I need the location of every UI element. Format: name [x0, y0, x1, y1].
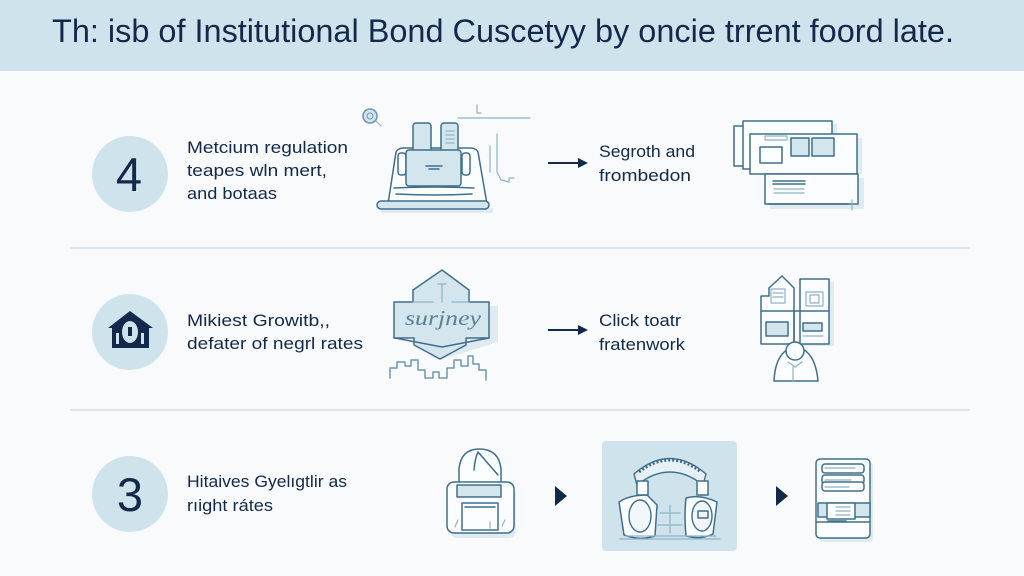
row 1 description: teapes wln mert,: [187, 161, 327, 180]
arrow: [548, 158, 588, 168]
row 2 result text: fratenwork: [599, 335, 686, 354]
arrow: [548, 325, 588, 335]
icon: survey shield and skyline: [390, 270, 498, 380]
arrow: [776, 486, 788, 506]
row 2 result text: [599, 311, 686, 354]
row 3: [92, 441, 873, 551]
row 3 description: [187, 472, 347, 515]
number badge 4: 4: [116, 148, 142, 201]
row 2 description: [187, 311, 363, 353]
row 3 description: rıight rátes: [187, 496, 273, 515]
row 1 result text: frombedon: [599, 166, 691, 185]
row 1 description: [187, 138, 348, 203]
row 1 result text: Segroth and: [599, 142, 695, 161]
row 2 description: defater of negrl rates: [187, 334, 363, 353]
row 1: [92, 105, 864, 213]
title: Th: isb of Institutional Bond Cuscetyy by oncie trrent foord late.: [52, 13, 954, 49]
icon: bag: [447, 449, 516, 538]
number badge 3: [92, 456, 168, 532]
row 1 result text: [599, 142, 695, 185]
house badge: [92, 294, 168, 370]
arrow: [555, 486, 567, 506]
icon: buildings and figure: [761, 276, 834, 381]
row 2: [92, 270, 834, 381]
icon: stacked documents: [734, 121, 864, 210]
number badge 4: [92, 136, 168, 212]
row 3 description: Hitaives Gyelıgtlir as: [187, 472, 347, 491]
panel: headphones illustration: [602, 441, 737, 551]
icon: document list: [816, 459, 873, 542]
icon: laptop and cylinders on stand: [363, 105, 530, 213]
header banner: [0, 0, 1024, 71]
row 2 result text: Click toatr: [599, 311, 681, 330]
row 1 description: and botaas: [187, 184, 277, 203]
row 1 description: Metcium regulation: [187, 138, 348, 157]
icon: survey shield and skyline: surjney: [405, 306, 482, 330]
number badge 3: 3: [117, 468, 143, 521]
row 2 description: Mikiest Growitb,,: [187, 311, 330, 330]
